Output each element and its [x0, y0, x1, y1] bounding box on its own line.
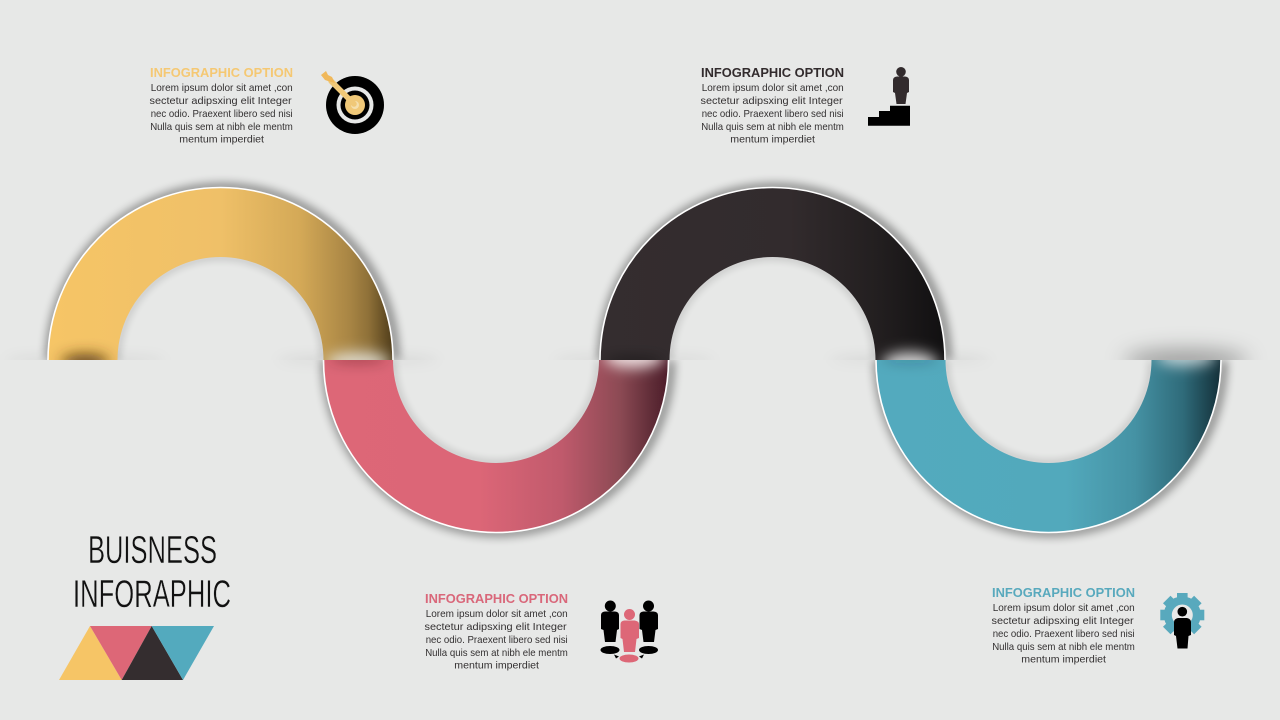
icon: team — [600, 600, 658, 662]
arc: yellow — [48, 188, 393, 360]
title: BUISNESS — [88, 529, 217, 572]
logo triangles — [59, 626, 214, 680]
body text — [150, 83, 293, 146]
icon: gear with person — [1160, 593, 1204, 648]
panel: dark option — [700, 65, 910, 146]
body text: mentum imperdiet — [454, 660, 539, 672]
body text: mentum imperdiet — [730, 134, 815, 146]
icon: person on stairs — [868, 67, 910, 126]
body text: nec odio. Praexent libero sed nisi — [426, 635, 568, 646]
body text: sectetur adipsxing elit Integer — [700, 96, 843, 107]
faint shadow bands above baseline — [118, 338, 1253, 360]
panel: yellow option — [150, 65, 384, 146]
arc: dark — [600, 188, 945, 360]
foot shading above baseline — [54, 341, 944, 360]
body text: nec odio. Praexent libero sed nisi — [993, 629, 1135, 640]
icon: target — [321, 71, 384, 134]
body text — [424, 609, 568, 672]
body text: sectetur adipsxing elit Integer — [424, 622, 567, 633]
body text: sectetur adipsxing elit Integer — [992, 616, 1134, 627]
body text: mentum imperdiet — [179, 134, 264, 146]
body text: nec odio. Praexent libero sed nisi — [151, 109, 293, 120]
body text: Lorem ipsum dolor sit amet ,con — [702, 83, 844, 94]
arc edge highlights — [48, 188, 1221, 532]
body text: Lorem ipsum dolor sit amet ,con — [426, 609, 568, 620]
title: INFORAPHIC — [73, 573, 231, 616]
body text: Nulla quis sem at nibh ele mentm — [425, 648, 568, 659]
title — [73, 529, 231, 616]
body text: Nulla quis sem at nibh ele mentm — [150, 122, 293, 133]
faint shadow bands below baseline — [278, 355, 990, 361]
body text: Nulla quis sem at nibh ele mentm — [701, 122, 844, 133]
foot shading below baseline — [326, 360, 1220, 378]
body text: Nulla quis sem at nibh ele mentm — [992, 642, 1135, 653]
body text — [992, 603, 1135, 666]
panel: blue option — [992, 585, 1204, 666]
body text: Lorem ipsum dolor sit amet ,con — [993, 603, 1135, 614]
panel: pink option — [424, 591, 658, 672]
heading: INFOGRAPHIC OPTION — [701, 65, 844, 80]
heading: INFOGRAPHIC OPTION — [992, 585, 1135, 600]
heading: INFOGRAPHIC OPTION — [150, 65, 293, 80]
serpentine ribbon — [5, 188, 1248, 532]
body text — [700, 83, 844, 146]
arc: blue — [876, 360, 1221, 532]
body text: nec odio. Praexent libero sed nisi — [702, 109, 844, 120]
heading: INFOGRAPHIC OPTION — [425, 591, 568, 606]
body text: sectetur adipsxing elit Integer — [150, 96, 292, 107]
body text: Lorem ipsum dolor sit amet ,con — [151, 83, 293, 94]
arc: pink — [324, 360, 668, 532]
body text: mentum imperdiet — [1021, 654, 1106, 666]
